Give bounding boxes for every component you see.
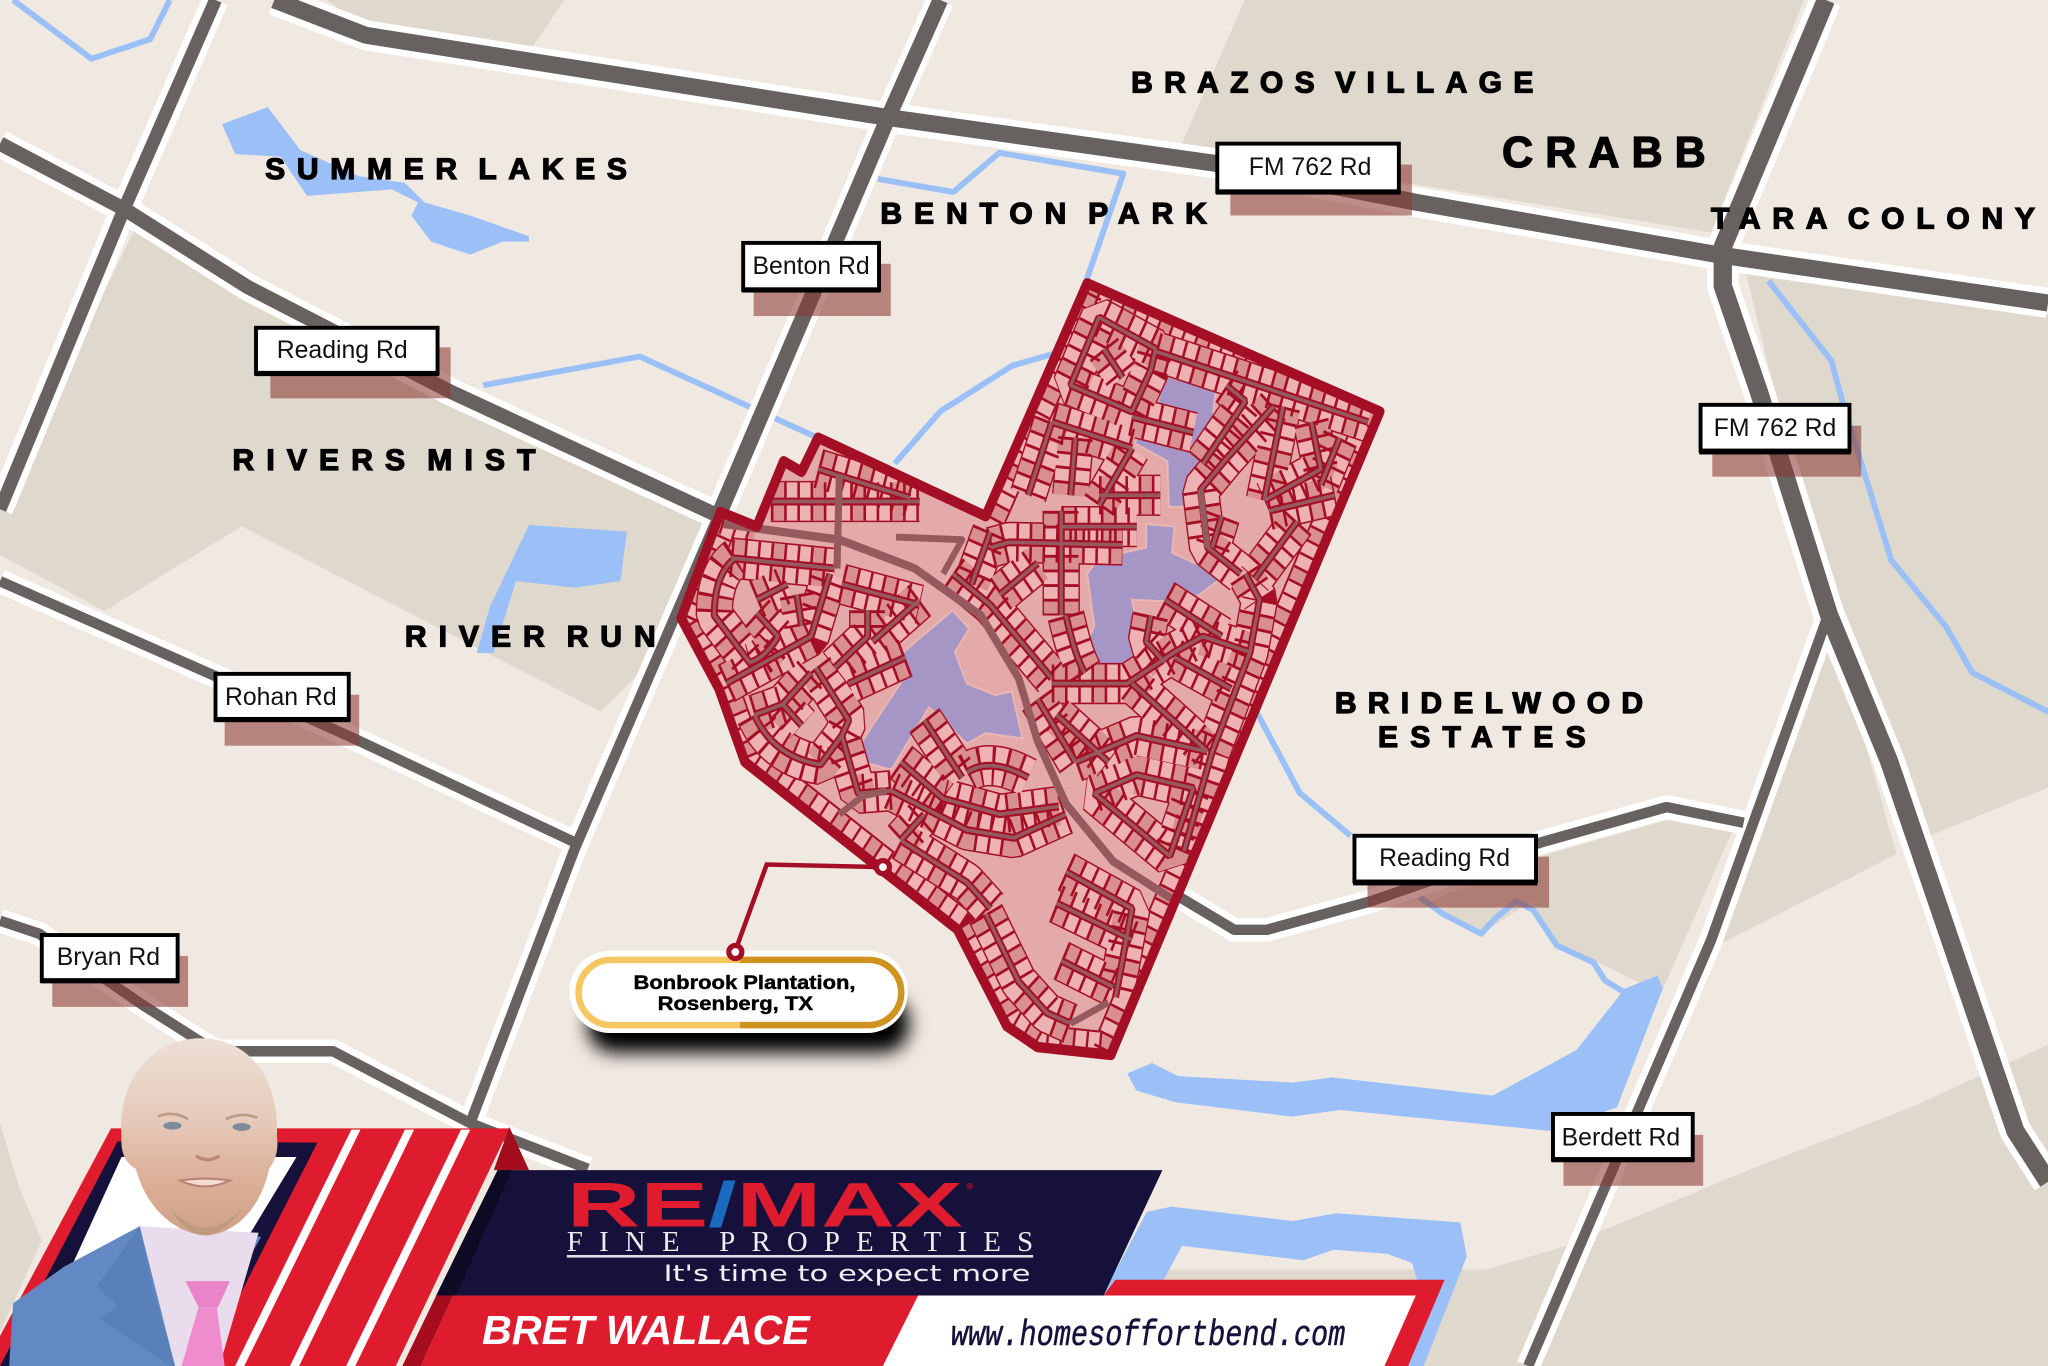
interior lakes: [861, 376, 1225, 770]
portrait: agent: [9, 1038, 277, 1366]
neighbourhood label: River Run: RIVER RUN: [405, 620, 656, 653]
road label: FM 762 Rd east: FM 762 Rd: [1714, 415, 1836, 442]
neighbourhood label: Summer Lakes: SUMMER LAKES: [265, 153, 627, 186]
subdivision base: [681, 283, 1380, 1055]
panel: agent banner: [0, 1038, 1445, 1366]
neighbourhood label: Bridelwood Estates: [1335, 687, 1643, 754]
lake: Summer Lakes: [222, 107, 529, 255]
neighbourhood label: Bridelwood Estates: BRIDELWOOD: [1335, 687, 1643, 720]
logo: RE/MAX: RE /MAX: [567, 1170, 963, 1240]
road label: FM 762 Rd top: [1216, 144, 1412, 215]
road label: Reading Rd east: [1353, 836, 1549, 908]
website: www.homesoffortbend.com: [951, 1315, 1345, 1356]
navy logo panel: [436, 1170, 1162, 1295]
road label: Bryan Rd: Bryan Rd: [57, 944, 160, 971]
road label: Berdett Rd: Berdett Rd: [1562, 1124, 1680, 1151]
agent name: BRET WALLACE: [482, 1307, 811, 1353]
website bar: [883, 1295, 1416, 1366]
road label: Reading Rd west: Reading Rd: [277, 337, 408, 364]
road label: Reading Rd west: [255, 328, 451, 398]
neighbourhood label: Rivers Mist: RIVERS MIST: [232, 444, 536, 477]
neighbourhood label: Brazos Village: BRAZOS VILLAGE: [1131, 67, 1533, 100]
navy photo frame: [0, 1141, 317, 1366]
callout: Bonbrook Plantation, Rosenberg, TX: Bonbrook Plantation,: [633, 972, 856, 994]
white diagonal stripes: [235, 1130, 470, 1366]
lake: bottom channel: [1097, 1207, 1467, 1366]
road label: Rohan Rd: [214, 674, 359, 746]
red angled panel: [0, 1128, 509, 1366]
neighbourhood label: Tara Colony: TARA COLONY: [1711, 203, 2035, 236]
logo: RE/MAX: ®: [967, 1182, 974, 1192]
logo: RE/MAX: It's time to expect more: [664, 1261, 1031, 1287]
road label: Bryan Rd: [40, 935, 188, 1007]
road label: Rohan Rd: Rohan Rd: [225, 684, 337, 711]
name bar: [421, 1295, 918, 1366]
road label: Benton Rd: [742, 243, 891, 316]
perimeter lots: [681, 283, 1380, 1055]
road label: Reading Rd east: Reading Rd: [1379, 845, 1510, 872]
main spine roads: [724, 474, 1208, 1023]
subdivision boundary: [681, 283, 1380, 1055]
callout: Bonbrook Plantation, Rosenberg, TX: [569, 861, 909, 1053]
panel: Bonbrook Plantation subdivision map: [681, 283, 1380, 1055]
road label: Benton Rd: Benton Rd: [753, 253, 870, 280]
lake: River Run: [477, 525, 627, 653]
neighbourhood label: Benton Park: BENTON PARK: [880, 197, 1207, 230]
logo: RE/MAX: FINE PROPERTIES: [567, 1226, 1033, 1258]
logo: RE/MAX: [567, 1170, 1033, 1287]
neighbourhood label: Crabb: CRABB: [1502, 129, 1706, 177]
road label: Berdett Rd: [1552, 1114, 1703, 1186]
neighbourhood label: Bridelwood Estates: ESTATES: [1378, 721, 1586, 754]
street blocks and house lots: [714, 317, 1368, 1023]
road label: FM 762 Rd top: FM 762 Rd: [1249, 154, 1371, 181]
road label: FM 762 Rd east: [1699, 405, 1861, 477]
lake: south channel: [1127, 976, 1663, 1131]
callout: Bonbrook Plantation, Rosenberg, TX: Rosenberg, TX: [658, 993, 813, 1015]
